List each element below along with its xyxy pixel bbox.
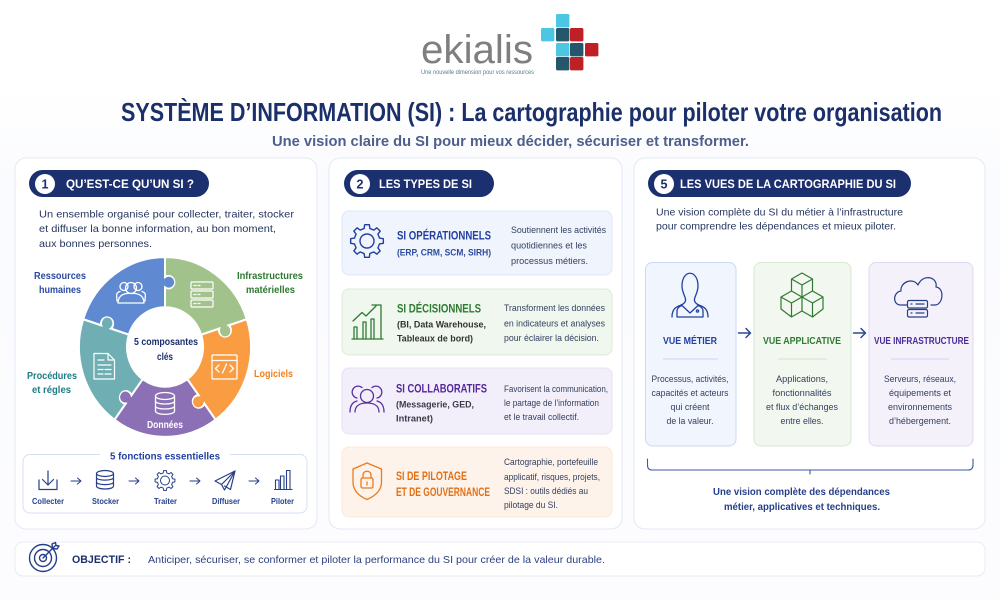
icon: database: [156, 392, 174, 414]
heading: les vues de la cartographie: [648, 170, 911, 197]
heading: les vues de la cartographie: LES VUES DE LA CARTOGRAPHIE DU SI: [680, 179, 896, 191]
card: vue métier: Processus, activités,: [652, 374, 728, 384]
panel: objectif: OBJECTIF :: [72, 554, 131, 566]
icon: gear: [351, 225, 383, 257]
heading: qu'est-ce qu'un SI: [29, 170, 209, 197]
card: vue métier: VUE MÉTIER: [663, 334, 717, 347]
icon: document: [94, 354, 114, 379]
icon: traiter: [155, 471, 175, 490]
labels: functions: Traiter: [154, 496, 178, 506]
text: definition: [39, 208, 295, 250]
panel: objectif: [15, 542, 985, 576]
card: vue métier: capacités et acteurs: [652, 388, 729, 398]
icon: collecter: [39, 471, 57, 490]
card: SI collaboratifs: et le travail collectif.: [504, 412, 579, 422]
icon: team: [350, 386, 384, 412]
logo: ekialis: ekialis: [421, 28, 533, 72]
card: vue métier: de la valeur.: [666, 416, 714, 426]
card: SI de pilotage et de gouvernance: SDSI : outils dédiés au: [504, 486, 588, 496]
label: Procédures et règles: et régles: [32, 384, 71, 396]
label: center of wheel: clés: [157, 351, 173, 363]
labels: functions: Piloter: [271, 496, 295, 506]
text: conclusion: [713, 487, 891, 513]
label: Ressources humaines: Ressources: [34, 270, 86, 282]
label: Logiciels: Logiciels: [254, 368, 293, 380]
card: SI collaboratifs: Intranet): [396, 414, 433, 424]
label: Ressources humaines: [34, 270, 86, 296]
card: SI décisionnels: (BI, Data Warehouse,: [397, 320, 486, 330]
panel: les types de SI: [329, 158, 622, 529]
card: SI de pilotage et de gouvernance: pilotage du SI.: [504, 500, 558, 510]
card: SI décisionnels: SI DÉCISIONNELS: [397, 300, 481, 316]
card: vue infrastructure: environnements: [888, 402, 953, 412]
text: definition: et diffuser la bonne information, au bon moment,: [39, 223, 276, 235]
arrows between functions: [71, 478, 259, 484]
icon: people: [117, 282, 145, 303]
icon: target: [30, 542, 59, 572]
text: conclusion: métier, applicatives et techniques.: [724, 502, 880, 513]
label: Données: Données: [147, 420, 183, 431]
text: intro: pour comprendre les dépendances et mieux piloter.: [656, 222, 896, 232]
card: SI de pilotage et de gouvernance: applicatif, risques, projets,: [504, 472, 600, 482]
heading: les types de SI: [344, 170, 494, 197]
label: center of wheel: 5 composantes: [134, 336, 198, 348]
card: SI de pilotage et de gouvernance: SI DE PILOTAGE: [396, 469, 467, 483]
card: SI opérationnels: [342, 211, 612, 275]
card: SI collaboratifs: (Messagerie, GED,: [396, 400, 474, 410]
panel: les vues de la cartographie: [634, 158, 985, 529]
labels: functions: Diffuser: [212, 496, 241, 506]
icon: server: [191, 282, 213, 307]
card: vue infrastructure: d’hébergement.: [889, 416, 951, 426]
icon: shield with lock: [353, 463, 382, 500]
text: intro: [656, 208, 903, 232]
heading: qu'est-ce qu'un SI: QU’EST-CE QU’UN SI ?: [66, 179, 194, 191]
label: Procédures et règles: [27, 370, 77, 396]
heading: qu'est-ce qu'un SI: 1: [42, 178, 49, 192]
card: SI opérationnels: quotidiennes et les: [511, 240, 588, 250]
card: SI de pilotage et de gouvernance: ET DE GOUVERNANCE: [396, 485, 490, 499]
card: vue applicative: entre elles.: [780, 416, 824, 426]
arrow: métier to applicative: [738, 328, 750, 338]
card: vue applicative: [754, 262, 851, 446]
card: vue applicative: et flux d’échanges: [766, 402, 839, 412]
text: definition: Un ensemble organisé pour collecter, traiter, stocker: [39, 208, 295, 220]
bracket: [648, 459, 973, 474]
label: Infrastructures matérielles: [237, 270, 303, 296]
labels: functions: Stocker: [92, 496, 120, 506]
card: vue infrastructure: VUE INFRASTRUCTURE: [874, 335, 969, 347]
label: center of wheel: [134, 336, 198, 363]
card: SI décisionnels: Tableaux de bord): [397, 334, 473, 344]
logo: ekialis: [421, 14, 598, 76]
card: SI collaboratifs: [342, 368, 612, 434]
card: SI collaboratifs: le partage de l’information: [504, 398, 599, 408]
label: Infrastructures matérielles: Infrastructures: [237, 270, 303, 282]
label: Ressources humaines: humaines: [39, 284, 81, 296]
text: conclusion: Une vision complète des dépendances: [713, 487, 891, 498]
card: vue métier: [646, 262, 736, 446]
labels: functions: Collecter: [32, 496, 65, 506]
text: intro: Une vision complète du SI du métier à l’infrastructure: [656, 208, 903, 218]
card: SI opérationnels: SI OPÉRATIONNELS: [397, 228, 491, 242]
icon: diffuser: [215, 471, 235, 490]
box: 5 fonctions essentielles: 5 fonctions essentielles: [110, 450, 220, 462]
icon: code window: [212, 355, 237, 379]
card: SI opérationnels: (ERP, CRM, SCM, SIRH): [397, 248, 491, 258]
icon: growth chart: [352, 305, 383, 339]
card: SI décisionnels: Transforment les données: [504, 303, 606, 313]
heading: les types de SI: 2: [357, 178, 364, 192]
card: vue applicative: VUE APPLICATIVE: [763, 335, 841, 347]
card: SI de pilotage et de gouvernance: Cartographie, portefeuille: [504, 457, 598, 467]
panel: qu'est-ce qu'un SI: [15, 158, 317, 529]
card: SI décisionnels: pour éclairer la décision.: [504, 333, 599, 343]
box: 5 fonctions essentielles: [23, 448, 307, 513]
chart: puzzle wheel of 5 components: [27, 238, 303, 470]
subtitle: Une vision claire du SI pour mieux décider, sécuriser et transformer.: [272, 133, 749, 150]
heading: les types de SI: LES TYPES DE SI: [379, 179, 472, 191]
arrow: applicative to infrastructure: [854, 328, 866, 338]
card: vue infrastructure: [869, 262, 973, 446]
card: SI opérationnels: Soutiennent les activités: [511, 225, 607, 235]
card: SI collaboratifs: SI COLLABORATIFS: [396, 382, 487, 396]
icon: piloter: [274, 470, 292, 490]
card: SI opérationnels: processus métiers.: [511, 256, 588, 266]
label: Infrastructures matérielles: matérielles: [246, 284, 295, 296]
label: Procédures et règles: Procédures: [27, 370, 77, 382]
card: SI de pilotage et de gouvernance: [342, 447, 612, 517]
card: SI décisionnels: en indicateurs et analyses: [504, 318, 606, 328]
labels: functions: [32, 496, 295, 506]
heading: les vues de la cartographie: 5: [661, 178, 668, 192]
panel: objectif: Anticiper, sécuriser, se conformer et piloter la performance du SI pour créer de la valeur durable.: [148, 554, 605, 566]
card: vue infrastructure: équipements et: [889, 388, 952, 398]
icon: cubes: [781, 273, 823, 317]
logo: ekialis: Une nouvelle dimension pour vos ressources: [421, 70, 534, 76]
card: vue applicative: Applications,: [776, 374, 828, 384]
card: vue infrastructure: Serveurs, réseaux,: [884, 374, 956, 384]
card: vue applicative: fonctionnalités: [772, 388, 832, 398]
icon: cloud server: [895, 278, 942, 317]
icon: stocker: [96, 470, 114, 489]
text: definition: aux bonnes personnes.: [39, 238, 152, 250]
icon: person: [672, 273, 708, 317]
card: SI décisionnels: [342, 289, 612, 355]
card: vue métier: qui créent: [670, 402, 710, 412]
card: SI collaboratifs: Favorisent la communication,: [504, 384, 608, 394]
